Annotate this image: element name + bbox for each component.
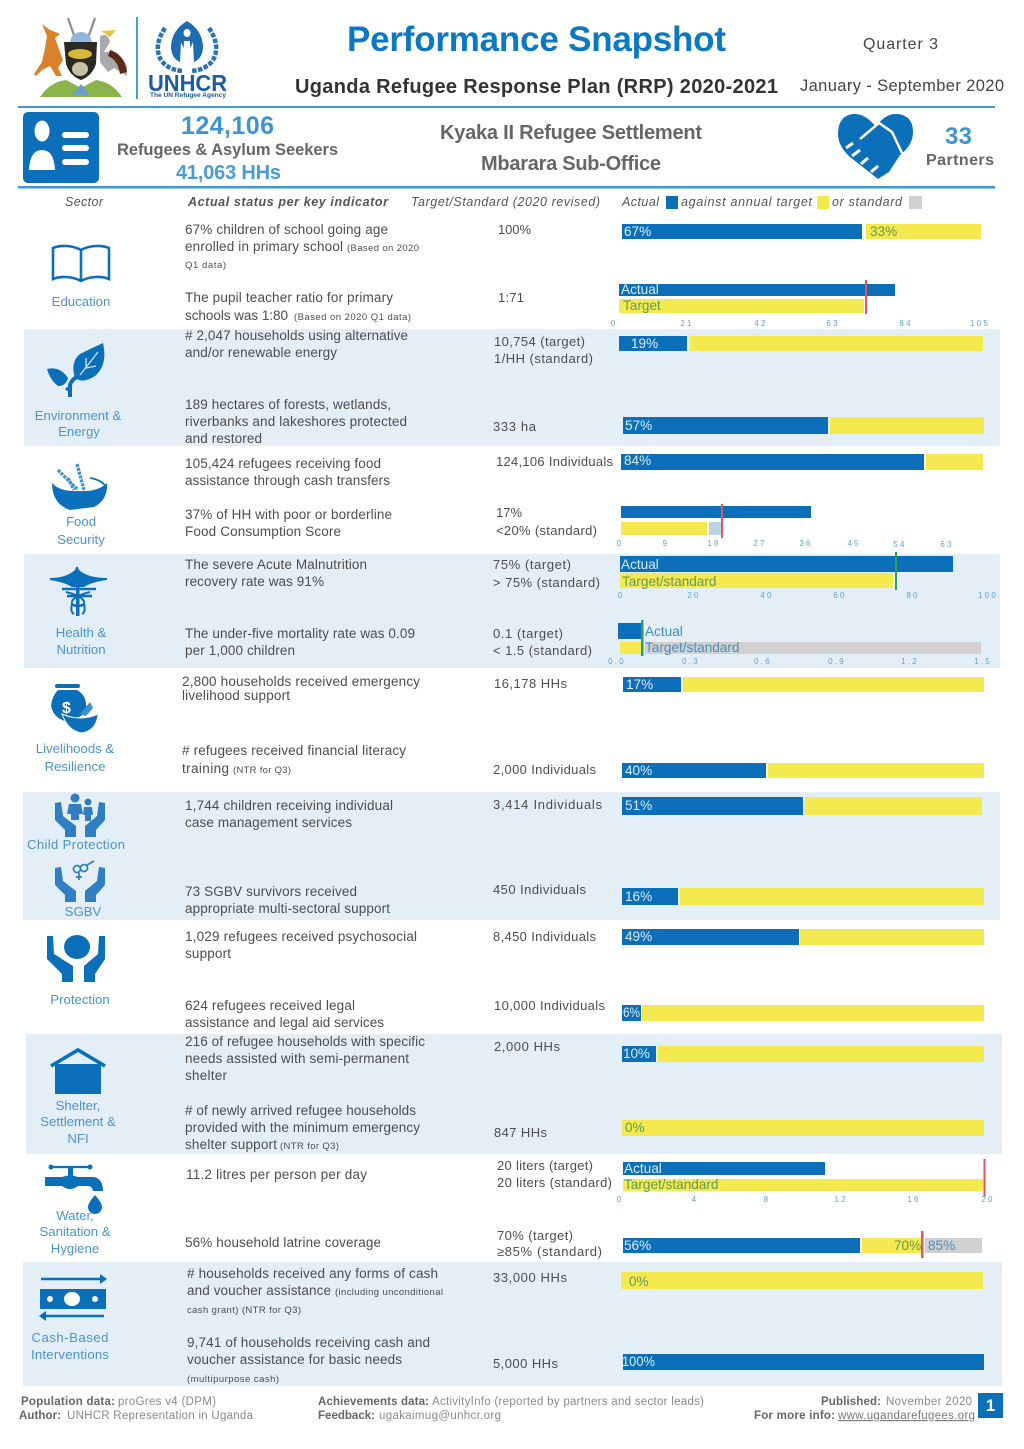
indicator: semi-permanent shelter: needs assisted with semi-permanent bbox=[185, 1051, 409, 1066]
footer: achievements and feedback bbox=[318, 1396, 704, 1422]
chart: malnutrition: 40 bbox=[760, 591, 774, 600]
indicator: food consumption bbox=[185, 507, 392, 539]
sector: health bbox=[50, 566, 107, 657]
chart: malnutrition: 60 bbox=[833, 591, 847, 600]
indicator: school enrolment bbox=[185, 222, 419, 271]
chart: under-five mortality: 0.3 bbox=[682, 657, 700, 666]
target: renewable energy: 10,754 (target) bbox=[494, 334, 585, 349]
chart: litres per day: 20 bbox=[981, 1195, 995, 1204]
chart: latrine coverage bbox=[623, 1231, 982, 1258]
chart: malnutrition: 0 bbox=[618, 591, 624, 600]
bar: psychosocial: 49% bbox=[625, 929, 652, 944]
label: Energy bbox=[58, 424, 100, 439]
sub-office: Mbarara Sub-Office bbox=[481, 153, 661, 175]
label: Child Protection bbox=[27, 837, 125, 852]
indicator: latrine coverage: 56% household latrine coverage bbox=[185, 1235, 381, 1250]
legend: actual bbox=[621, 195, 678, 209]
chart: food consumption bbox=[617, 504, 954, 549]
bar: child case management bbox=[622, 797, 982, 815]
sector: livelihoods bbox=[36, 684, 114, 774]
bar: legal assistance: 6% bbox=[623, 1005, 640, 1020]
partners number: 33 bbox=[945, 123, 972, 150]
indicator: livelihood support: livelihood support bbox=[182, 688, 290, 703]
target: malnutrition: > 75% (standard) bbox=[493, 575, 600, 590]
indicator: basic needs: 9,741 of households receiving cash and bbox=[187, 1335, 430, 1350]
indicator: child case management: 1,744 children receiving individual bbox=[185, 798, 393, 813]
label: Sanitation & bbox=[39, 1224, 111, 1239]
subtitle: Uganda Refugee Response Plan (RRP) 2020-2021 bbox=[295, 76, 778, 98]
label: Livelihoods & bbox=[36, 741, 114, 756]
chart: litres per day bbox=[617, 1159, 995, 1204]
icon: banknote with arrows bbox=[39, 1274, 107, 1321]
icon: Uganda coat of arms bbox=[34, 18, 127, 97]
sector: cash bbox=[31, 1274, 109, 1362]
bar: child case management: 51% bbox=[625, 798, 652, 813]
partners label: Partners bbox=[926, 152, 994, 169]
sector: shelter bbox=[40, 1050, 116, 1146]
sector: water bbox=[39, 1164, 111, 1256]
footer: achievements and feedback: Feedback: bbox=[318, 1410, 375, 1422]
band: health bbox=[24, 554, 1000, 668]
indicator: livelihood support: 2,800 households received emergency bbox=[182, 674, 420, 689]
target: food consumption: 17% bbox=[496, 505, 522, 520]
indicator: psychosocial: 1,029 refugees received psychosocial bbox=[185, 929, 417, 944]
chart: food consumption: 54 bbox=[893, 540, 907, 549]
indicator: livelihood support bbox=[182, 674, 420, 703]
icon: money bag and bowl: $ bbox=[62, 700, 71, 717]
label: Shelter, bbox=[56, 1098, 100, 1113]
indicator: malnutrition bbox=[185, 557, 367, 589]
indicator: financial literacy: (NTR for Q3) bbox=[233, 765, 291, 776]
legend: actual: Actual bbox=[621, 195, 660, 209]
chart: pupil teacher ratio bbox=[611, 280, 990, 328]
bar: basic needs: 100% bbox=[622, 1354, 655, 1369]
icon: leaves bbox=[47, 343, 104, 397]
chart: pupil teacher ratio: Target bbox=[623, 298, 661, 313]
indicator: renewable energy: and/or renewable energy bbox=[185, 345, 337, 360]
target: school enrolment: 100% bbox=[498, 222, 531, 237]
divider bbox=[136, 17, 138, 99]
target: under-five mortality: 0.1 (target) bbox=[493, 626, 563, 641]
chart: food consumption: 9 bbox=[663, 539, 669, 548]
indicator: cash and voucher: # households received any forms of cash bbox=[187, 1266, 438, 1281]
quarter: Quarter 3 bbox=[863, 36, 938, 53]
chart: litres per day: 12 bbox=[834, 1195, 848, 1204]
sector: food security bbox=[52, 464, 107, 547]
indicator: food transfers: assistance through cash transfers bbox=[185, 473, 390, 488]
indicator: child case management: case management services bbox=[185, 815, 352, 830]
sector: protection bbox=[47, 935, 110, 1007]
sector: education bbox=[52, 246, 110, 309]
label: Nutrition bbox=[56, 642, 106, 657]
target: litres per day: 20 liters (standard) bbox=[497, 1175, 612, 1190]
indicator: renewable energy bbox=[185, 328, 408, 360]
icon: bowl with grain bbox=[52, 464, 107, 510]
chart: pupil teacher ratio: 42 bbox=[754, 319, 768, 328]
bar: school enrolment: 67% bbox=[624, 224, 651, 239]
chart: litres per day: 8 bbox=[764, 1195, 770, 1204]
target: latrine coverage bbox=[497, 1228, 602, 1259]
bar: psychosocial bbox=[622, 929, 984, 945]
target: food consumption: <20% (standard) bbox=[496, 523, 597, 538]
label bbox=[36, 741, 114, 774]
bar: basic needs bbox=[622, 1354, 984, 1370]
indicator: pupil teacher ratio: (Based on 2020 Q1 data) bbox=[294, 312, 411, 323]
icon: UNHCR emblem bbox=[158, 21, 216, 71]
population figures bbox=[117, 112, 338, 184]
bar: emergency shelter: 0% bbox=[625, 1120, 645, 1135]
indicator: financial literacy bbox=[182, 743, 406, 776]
icon: hands with gender symbol bbox=[55, 861, 105, 902]
chart: food consumption: 36 bbox=[799, 539, 813, 548]
indicator: semi-permanent shelter: 216 of refugee households with specific bbox=[185, 1034, 425, 1049]
chart: pupil teacher ratio: Actual bbox=[621, 282, 659, 297]
footer: data sources: Author: bbox=[19, 1410, 61, 1422]
chart: malnutrition: 100 bbox=[978, 591, 998, 600]
chart: malnutrition: Actual bbox=[621, 557, 659, 572]
chart: malnutrition: Target/standard bbox=[622, 574, 716, 589]
indicator: cash and voucher bbox=[187, 1266, 443, 1316]
target: latrine coverage: ≥85% (standard) bbox=[497, 1244, 602, 1259]
heading: sector: Sector bbox=[65, 195, 104, 209]
bar: financial literacy: 40% bbox=[625, 763, 652, 778]
label: Hygiene bbox=[51, 1241, 99, 1256]
chart: under-five mortality: 0.6 bbox=[754, 657, 772, 666]
indicator: basic needs bbox=[187, 1335, 430, 1385]
indicator: legal assistance: assistance and legal aid services bbox=[185, 1015, 384, 1030]
indicator: SGBV survivors: appropriate multi-sectoral support bbox=[185, 901, 390, 916]
icon: handshake heart bbox=[838, 114, 913, 179]
chart: latrine coverage: 85% bbox=[928, 1238, 955, 1253]
indicator: semi-permanent shelter: shelter bbox=[185, 1068, 228, 1083]
target: SGBV survivors: 450 Individuals bbox=[493, 882, 586, 897]
indicator: forests bbox=[185, 397, 407, 446]
footer: data sources: Population data: bbox=[21, 1396, 115, 1408]
chart: litres per day: 16 bbox=[907, 1195, 921, 1204]
target: litres per day: 20 liters (target) bbox=[497, 1158, 593, 1173]
bar: semi-permanent shelter: 10% bbox=[623, 1046, 650, 1061]
chart: malnutrition bbox=[618, 552, 998, 600]
label: Environment & bbox=[35, 408, 121, 423]
population label: Refugees & Asylum Seekers bbox=[117, 141, 338, 159]
indicator: food transfers bbox=[185, 456, 390, 488]
legend: standard: or standard bbox=[832, 195, 903, 209]
chart: malnutrition: 20 bbox=[687, 591, 701, 600]
indicator: child case management bbox=[185, 798, 393, 830]
bar: renewable energy bbox=[619, 336, 983, 351]
bar: legal assistance bbox=[622, 1005, 984, 1021]
chart: food consumption: 0 bbox=[617, 539, 623, 548]
chart: under-five mortality bbox=[608, 620, 992, 666]
bar: cash and voucher: 0% bbox=[629, 1274, 649, 1289]
legend: annual target: against annual target bbox=[681, 195, 813, 209]
bar: food transfers bbox=[621, 453, 983, 470]
indicator: under-five mortality: The under-five mortality rate was 0.09 bbox=[185, 626, 415, 641]
indicator: school enrolment: Q1 data) bbox=[185, 260, 226, 271]
tagline: The UN Refugee Agency bbox=[150, 93, 227, 99]
bar: forests: 57% bbox=[625, 418, 652, 433]
indicator: cash and voucher: and voucher assistance bbox=[187, 1283, 331, 1298]
target: psychosocial: 8,450 Individuals bbox=[493, 929, 596, 944]
bar: semi-permanent shelter bbox=[622, 1046, 984, 1062]
indicator: malnutrition: recovery rate was 91% bbox=[185, 574, 324, 589]
band: shelter bbox=[26, 1034, 1002, 1154]
icon: caduceus bbox=[50, 566, 107, 616]
label: Health & bbox=[56, 625, 106, 640]
icon: population card bbox=[23, 112, 99, 183]
indicator: SGBV survivors: 73 SGBV survivors received bbox=[185, 884, 357, 899]
icon: hands holding person bbox=[47, 935, 105, 982]
indicator: financial literacy: training bbox=[182, 761, 229, 776]
label: Resilience bbox=[45, 759, 105, 774]
indicator: school enrolment: enrolled in primary school bbox=[185, 239, 343, 254]
page number bbox=[978, 1393, 1003, 1418]
band: cash bbox=[23, 1262, 1002, 1386]
bar: food transfers: 84% bbox=[624, 453, 651, 468]
chart: pupil teacher ratio: 84 bbox=[899, 319, 913, 328]
label: NFI bbox=[67, 1131, 89, 1146]
target: malnutrition: 75% (target) bbox=[493, 557, 571, 572]
target: under-five mortality bbox=[493, 626, 592, 658]
indicator: financial literacy: # refugees received financial literacy bbox=[182, 743, 406, 758]
label: Education bbox=[52, 294, 110, 309]
settlement name: Kyaka II Refugee Settlement bbox=[440, 122, 702, 144]
target: basic needs: 5,000 HHs bbox=[493, 1356, 558, 1371]
indicator: under-five mortality bbox=[185, 626, 415, 658]
indicator: food consumption: 37% of HH with poor or borderline bbox=[185, 507, 392, 522]
indicator: semi-permanent shelter bbox=[185, 1034, 425, 1083]
footer: achievements and feedback: Achievements data: bbox=[318, 1396, 429, 1408]
bar: school enrolment bbox=[622, 224, 981, 239]
bar: SGBV survivors bbox=[622, 888, 984, 905]
chart: pupil teacher ratio: 21 bbox=[680, 319, 694, 328]
indicator: food consumption: Food Consumption Score bbox=[185, 524, 341, 539]
header logos bbox=[34, 17, 227, 99]
chart: malnutrition: 80 bbox=[906, 591, 920, 600]
indicator: pupil teacher ratio: The pupil teacher ratio for primary bbox=[185, 290, 393, 305]
bar: SGBV survivors: 16% bbox=[625, 889, 652, 904]
chart: latrine coverage: 70% bbox=[894, 1238, 921, 1253]
label: Interventions bbox=[31, 1347, 109, 1362]
footer: achievements and feedback: ugakaimug@unhcr.org bbox=[379, 1410, 501, 1422]
target: under-five mortality: < 1.5 (standard) bbox=[493, 643, 592, 658]
target: emergency shelter: 847 HHs bbox=[494, 1125, 548, 1140]
bar: school enrolment: 33% bbox=[870, 224, 897, 239]
icon: open book bbox=[53, 246, 109, 281]
indicator: emergency shelter bbox=[185, 1103, 420, 1152]
indicator: basic needs: (multipurpose cash) bbox=[187, 1374, 279, 1385]
target: cash and voucher: 33,000 HHs bbox=[493, 1270, 568, 1285]
bar: livelihood support: 17% bbox=[626, 677, 653, 692]
chart: food consumption: 63 bbox=[940, 540, 954, 549]
chart: under-five mortality: 1.5 bbox=[974, 657, 992, 666]
UNHCR wordmark: UNHCR bbox=[148, 70, 227, 96]
indicator: school enrolment: 67% children of school going age bbox=[185, 222, 388, 237]
indicator: emergency shelter: provided with the minimum emergency bbox=[185, 1120, 420, 1135]
icon: hands with children bbox=[55, 794, 105, 837]
target: pupil teacher ratio: 1:71 bbox=[498, 290, 524, 305]
icon: tap and drop bbox=[45, 1164, 103, 1214]
bar: renewable energy: 19% bbox=[631, 336, 658, 351]
footer: published and website: For more info: bbox=[754, 1410, 835, 1422]
chart: pupil teacher ratio: 105 bbox=[970, 319, 990, 328]
target: litres per day bbox=[497, 1158, 612, 1190]
indicator: forests: riverbanks and lakeshores protected bbox=[185, 414, 407, 429]
settlement bbox=[440, 122, 702, 175]
footer: data sources: UNHCR Representation in Uganda bbox=[67, 1410, 254, 1422]
sector: child protection bbox=[27, 794, 125, 852]
chart: litres per day: 0 bbox=[617, 1195, 623, 1204]
indicator: renewable energy: # 2,047 households using alternative bbox=[185, 328, 408, 343]
target: forests: 333 ha bbox=[493, 419, 537, 434]
indicator: emergency shelter: shelter support bbox=[185, 1137, 277, 1152]
indicator: emergency shelter: (NTR for Q3) bbox=[280, 1141, 339, 1152]
footer: data sources bbox=[19, 1396, 254, 1422]
chart: litres per day: Actual bbox=[624, 1161, 662, 1176]
label: Food bbox=[66, 514, 96, 529]
label: Protection bbox=[50, 992, 110, 1007]
target: renewable energy: 1/HH (standard) bbox=[494, 351, 593, 366]
households: 41,063 HHs bbox=[176, 162, 281, 184]
indicator: pupil teacher ratio: schools was 1:80 bbox=[185, 308, 288, 323]
bar: livelihood support bbox=[623, 677, 984, 692]
indicator: psychosocial bbox=[185, 929, 417, 961]
indicator: malnutrition: The severe Acute Malnutrition bbox=[185, 557, 367, 572]
partners bbox=[926, 123, 994, 169]
chart: pupil teacher ratio: 63 bbox=[826, 319, 840, 328]
target: legal assistance: 10,000 Individuals bbox=[494, 998, 606, 1013]
chart: under-five mortality: 0.0 bbox=[608, 657, 626, 666]
label: Security bbox=[57, 532, 105, 547]
target: food transfers: 124,106 Individuals bbox=[496, 454, 614, 469]
label bbox=[57, 514, 105, 547]
indicator: school enrolment: (Based on 2020 bbox=[347, 243, 419, 254]
chart: under-five mortality: Actual bbox=[645, 624, 683, 639]
chart: under-five mortality: 0.9 bbox=[828, 657, 846, 666]
bar: emergency shelter bbox=[622, 1120, 984, 1136]
indicator: psychosocial: support bbox=[185, 946, 231, 961]
bar: forests bbox=[623, 417, 984, 434]
indicator: cash and voucher: (including unconditional bbox=[335, 1287, 443, 1298]
chart: food consumption: 45 bbox=[847, 539, 861, 548]
header rule lower bbox=[18, 186, 995, 188]
target: food consumption bbox=[496, 505, 597, 538]
heading: target: Target/Standard (2020 revised) bbox=[411, 195, 600, 209]
footer: published and website: www.ugandarefugees.org bbox=[837, 1410, 975, 1422]
band: child protection and SGBV bbox=[23, 792, 1000, 920]
header rule bbox=[18, 106, 995, 108]
footer: published and website bbox=[754, 1396, 975, 1422]
footer: data sources: proGres v4 (DPM) bbox=[118, 1396, 216, 1408]
heading: actual status: Actual status per key indicator bbox=[187, 195, 389, 209]
footer: published and website: Published: bbox=[821, 1396, 881, 1408]
target: child case management: 3,414 Individuals bbox=[493, 797, 602, 812]
sector: SGBV bbox=[55, 861, 105, 919]
indicator: SGBV survivors bbox=[185, 884, 390, 916]
sector: environment bbox=[35, 343, 121, 439]
indicator: emergency shelter: # of newly arrived refugee households bbox=[185, 1103, 416, 1118]
band: environment bbox=[24, 329, 1000, 446]
population number: 124,106 bbox=[181, 112, 274, 140]
bar: cash and voucher bbox=[621, 1272, 983, 1289]
label: Settlement & bbox=[40, 1114, 116, 1129]
chart: pupil teacher ratio: 0 bbox=[611, 319, 617, 328]
label bbox=[40, 1098, 116, 1146]
footer: achievements and feedback: ActivityInfo (reported by partners and sector leads) bbox=[432, 1396, 704, 1408]
indicator: pupil teacher ratio bbox=[185, 290, 411, 323]
indicator: basic needs: voucher assistance for basic needs bbox=[187, 1352, 402, 1367]
label: SGBV bbox=[65, 904, 102, 919]
indicator: under-five mortality: per 1,000 children bbox=[185, 643, 295, 658]
target: latrine coverage: 70% (target) bbox=[497, 1228, 573, 1243]
chart: under-five mortality: 1.2 bbox=[901, 657, 919, 666]
label: Cash-Based bbox=[32, 1330, 108, 1345]
label bbox=[31, 1330, 109, 1362]
indicator: litres per day: 11.2 litres per person per day bbox=[186, 1167, 367, 1182]
indicator: forests: and restored bbox=[185, 431, 262, 446]
icon: house bbox=[51, 1050, 105, 1094]
chart: litres per day: 4 bbox=[692, 1195, 698, 1204]
indicator: forests: 189 hectares of forests, wetlands, bbox=[185, 397, 391, 412]
label bbox=[39, 1208, 111, 1256]
page number: 1 bbox=[986, 1396, 995, 1415]
indicator: legal assistance bbox=[185, 998, 384, 1030]
bar: financial literacy bbox=[622, 763, 984, 778]
target: financial literacy: 2,000 Individuals bbox=[493, 762, 596, 777]
label bbox=[56, 625, 106, 657]
chart: litres per day: Target/standard bbox=[624, 1177, 718, 1192]
label: Water, bbox=[56, 1208, 94, 1223]
indicator: legal assistance: 624 refugees received legal bbox=[185, 998, 355, 1013]
target: renewable energy bbox=[494, 334, 593, 366]
footer: published and website: November 2020 bbox=[886, 1396, 972, 1408]
target: livelihood support: 16,178 HHs bbox=[494, 676, 568, 691]
chart: under-five mortality: Target/standard bbox=[645, 640, 739, 655]
label bbox=[35, 408, 121, 439]
chart: food consumption: 18 bbox=[707, 539, 721, 548]
indicator: food transfers: 105,424 refugees receiving food bbox=[185, 456, 381, 471]
indicator: cash and voucher: cash grant) (NTR for Q3) bbox=[187, 1305, 301, 1316]
chart: latrine coverage: 56% bbox=[624, 1238, 651, 1253]
column headings and legend bbox=[65, 195, 922, 209]
title: Performance Snapshot bbox=[347, 20, 726, 59]
period: January - September 2020 bbox=[800, 77, 1004, 95]
target: semi-permanent shelter: 2,000 HHs bbox=[494, 1039, 560, 1054]
target: malnutrition bbox=[493, 557, 600, 590]
chart: food consumption: 27 bbox=[753, 539, 767, 548]
